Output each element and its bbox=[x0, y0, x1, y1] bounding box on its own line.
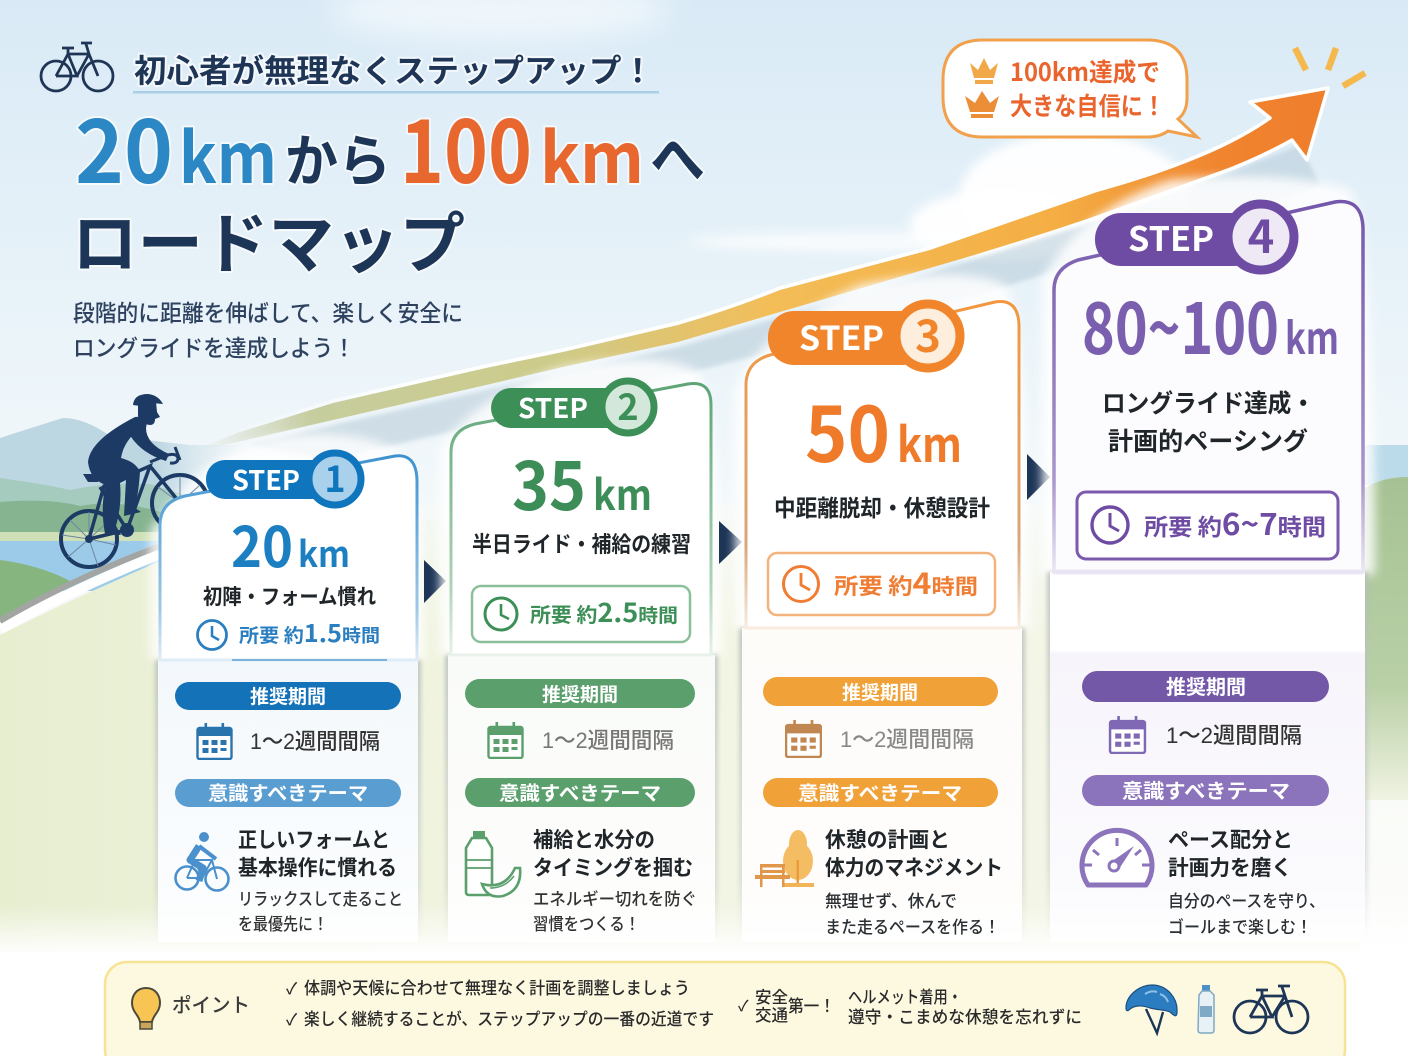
upper card bbox=[451, 383, 711, 655]
step badge: STEP bbox=[232, 459, 300, 498]
period value bbox=[488, 722, 674, 758]
safety note: ✓ bbox=[738, 998, 749, 1015]
cyclist silhouette bbox=[61, 394, 208, 567]
period value: 1〜2週間間隔 bbox=[542, 728, 674, 753]
theme text: 無理せず、休んで bbox=[825, 892, 957, 911]
panel: step 3 bbox=[735, 275, 1030, 942]
step title: 中距離脱却・休憩設計 bbox=[774, 495, 990, 521]
title: km bbox=[540, 103, 644, 204]
title: ロードマップ bbox=[72, 191, 465, 287]
white halo behind step 1 bbox=[150, 434, 425, 660]
panel: points bar bbox=[105, 962, 1345, 1056]
callout bubble: 100km達成で bbox=[1010, 53, 1160, 89]
distance: 80~100 bbox=[1082, 274, 1279, 375]
duration box bbox=[768, 553, 995, 615]
safety note: 遵守・こまめな休憩を忘れずに bbox=[848, 1008, 1082, 1027]
theme pill bbox=[763, 778, 998, 807]
tips: ✓ bbox=[286, 1012, 298, 1029]
step badge: 3 bbox=[915, 301, 941, 365]
icon: bottle and banana bbox=[466, 831, 520, 896]
icon: rider bbox=[176, 832, 228, 890]
safety note: ヘルメット着用・ bbox=[848, 988, 962, 1007]
step title: 計画的ペーシング bbox=[1108, 427, 1308, 456]
theme text: を最優先に！ bbox=[238, 915, 328, 934]
title: km bbox=[179, 103, 277, 204]
clouds bbox=[690, 133, 1190, 260]
theme text bbox=[1168, 829, 1325, 937]
step title: 半日ライド・補給の練習 bbox=[472, 532, 691, 557]
panel: step 1 bbox=[155, 451, 421, 942]
icon: speedometer bbox=[1082, 830, 1152, 885]
upper card bbox=[1054, 202, 1363, 572]
theme text: 体力のマネジメント bbox=[825, 857, 1003, 880]
theme pill: 意識すべきテーマ bbox=[1122, 780, 1290, 803]
theme text: エネルギー切れを防ぐ bbox=[533, 890, 697, 909]
step badge: STEP bbox=[1128, 212, 1214, 261]
tips: ✓ bbox=[286, 981, 298, 998]
arrow between steps 1 and 2 bbox=[424, 560, 446, 603]
distance: km bbox=[593, 462, 652, 523]
road band shadow bbox=[250, 145, 1320, 460]
duration box: 所要 約2.5時間 bbox=[530, 593, 678, 630]
step badge bbox=[206, 451, 361, 505]
theme text bbox=[825, 829, 1003, 937]
duration box bbox=[1077, 492, 1338, 559]
icon: bench and tree bbox=[755, 830, 814, 887]
safety note: 安全 bbox=[755, 988, 788, 1007]
distance: 20 bbox=[231, 503, 293, 584]
distance: km bbox=[298, 526, 350, 578]
icon: light bulb bbox=[132, 988, 160, 1029]
period value: 1〜2週間間隔 bbox=[840, 727, 974, 752]
title bbox=[72, 83, 705, 287]
period value: 1〜2週間間隔 bbox=[250, 729, 380, 754]
upper card bbox=[746, 301, 1019, 628]
heading: subtitle line: 初心者が無理なくステップアップ！ bbox=[134, 53, 654, 89]
step badge: STEP bbox=[518, 387, 588, 426]
period pill: 推奨期間 bbox=[250, 686, 326, 708]
duration: 所要 約1.5時間 bbox=[239, 614, 380, 649]
period pill: 推奨期間 bbox=[1166, 676, 1246, 699]
period value: 1〜2週間間隔 bbox=[1166, 723, 1302, 748]
period value bbox=[198, 723, 380, 759]
icon: bicycle header bbox=[41, 43, 113, 91]
step badge: 2 bbox=[617, 379, 639, 431]
distance: 35 bbox=[512, 434, 586, 530]
step badge: 1 bbox=[324, 451, 346, 503]
step badge: STEP bbox=[799, 312, 884, 360]
safety note bbox=[738, 988, 1082, 1027]
title: へ bbox=[650, 113, 705, 197]
distance bbox=[805, 374, 962, 484]
theme pill: 意識すべきテーマ bbox=[499, 782, 661, 805]
theme text: 習慣をつくる！ bbox=[533, 915, 640, 934]
subtitle text: ロングライドを達成しよう！ bbox=[73, 335, 355, 361]
icon: helmet bbox=[1126, 985, 1177, 1033]
theme text: 補給と水分の bbox=[533, 829, 655, 852]
landscape: mountains, lake and hills bbox=[0, 418, 1408, 1056]
theme text: 休憩の計画と bbox=[825, 829, 950, 852]
point label: ポイント bbox=[172, 994, 250, 1017]
step badge bbox=[491, 379, 654, 433]
right side lake and hill bbox=[1360, 445, 1408, 485]
high cloud bbox=[330, 0, 670, 40]
callout bubble: 大きな自信に！ bbox=[1010, 93, 1165, 121]
title: 100 bbox=[400, 83, 532, 208]
theme text: また走るペースを作る！ bbox=[825, 918, 1000, 937]
icon: bicycle bbox=[1234, 986, 1308, 1033]
period pill bbox=[175, 682, 401, 710]
duration box: 所要 約6~7時間 bbox=[1144, 500, 1326, 544]
theme text: 正しいフォームと bbox=[238, 829, 390, 852]
duration box bbox=[472, 586, 690, 642]
upper card bbox=[160, 456, 417, 660]
theme pill: 意識すべきテーマ bbox=[208, 782, 368, 805]
subtitle text bbox=[73, 300, 463, 361]
lower card bbox=[1050, 572, 1365, 942]
icon: sparkle rays bbox=[1295, 48, 1365, 86]
subtitle text: 段階的に距離を伸ばして、楽しく安全に bbox=[73, 300, 463, 326]
title: から bbox=[285, 117, 391, 198]
tips: 楽しく継続することが、ステップアップの一番の近道です bbox=[304, 1009, 714, 1029]
lower card bbox=[158, 660, 418, 942]
lower card bbox=[742, 628, 1022, 942]
icon: water bottle bbox=[1198, 985, 1214, 1033]
step badge bbox=[1095, 201, 1294, 270]
callout bubble bbox=[943, 40, 1197, 137]
theme pill: 意識すべきテーマ bbox=[798, 782, 962, 805]
distance: 50 bbox=[805, 374, 890, 484]
theme text: タイミングを掴む bbox=[533, 856, 693, 880]
step badge: 4 bbox=[1248, 201, 1274, 266]
arrow between steps 3 and 4 bbox=[1027, 454, 1050, 500]
distance: km bbox=[1285, 303, 1339, 367]
period value bbox=[1110, 716, 1302, 753]
theme text: 計画力を磨く bbox=[1168, 857, 1292, 880]
distance bbox=[512, 434, 652, 530]
theme text: リラックスして走ること bbox=[238, 890, 403, 909]
safety note: 第一！ bbox=[788, 997, 835, 1016]
theme text bbox=[533, 829, 697, 934]
period pill bbox=[1082, 671, 1329, 702]
period value bbox=[786, 720, 974, 757]
step badge bbox=[768, 301, 960, 368]
panel: step 4 bbox=[1042, 177, 1375, 942]
theme text: 基本操作に慣れる bbox=[238, 857, 397, 880]
theme text: 自分のペースを守り、 bbox=[1168, 892, 1325, 911]
theme text: ペース配分と bbox=[1168, 829, 1293, 852]
theme pill bbox=[1082, 775, 1329, 806]
period pill bbox=[465, 679, 695, 708]
step title: ロングライド達成・ bbox=[1102, 389, 1315, 418]
title: 20 bbox=[75, 83, 173, 208]
theme text bbox=[238, 829, 403, 934]
panel: step 2 bbox=[440, 359, 722, 942]
tips: 体調や天候に合わせて無理なく計画を調整しましょう bbox=[304, 979, 690, 998]
tips bbox=[286, 979, 714, 1029]
period pill bbox=[763, 677, 998, 706]
theme pill bbox=[175, 779, 401, 807]
theme pill bbox=[465, 778, 695, 807]
icon: crown bbox=[965, 91, 999, 118]
distance: km bbox=[897, 406, 962, 476]
growth arrow bbox=[190, 88, 1328, 452]
period pill: 推奨期間 bbox=[542, 684, 618, 706]
lower card bbox=[448, 655, 715, 942]
period pill: 推奨期間 bbox=[842, 682, 918, 704]
safety note: 交通 bbox=[755, 1006, 788, 1025]
distance bbox=[231, 503, 350, 584]
duration box: 所要 約 4時間 bbox=[834, 561, 978, 603]
step title bbox=[1102, 389, 1315, 456]
arrow between steps 2 and 3 bbox=[719, 521, 742, 564]
theme text: ゴールまで楽しむ！ bbox=[1168, 917, 1312, 937]
step title: 初陣・フォーム慣れ bbox=[203, 586, 376, 609]
icon: crown bbox=[970, 58, 998, 84]
